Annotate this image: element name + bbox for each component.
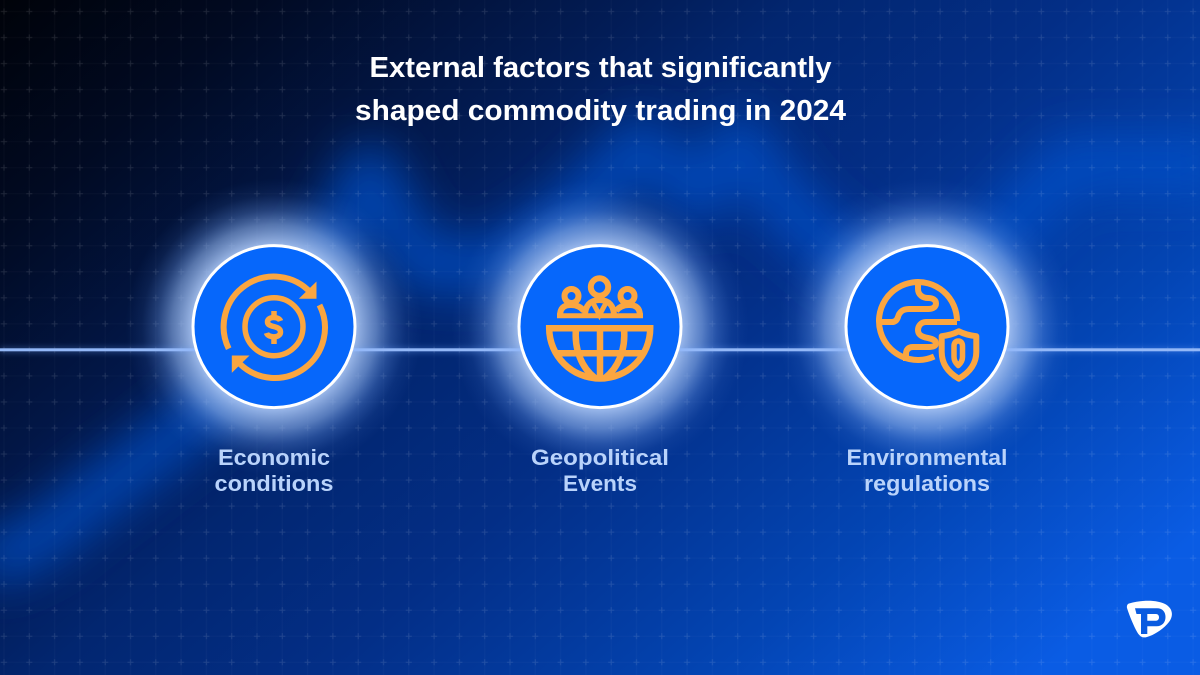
label [214,445,334,496]
horizontal timeline [0,347,1200,353]
logo [1127,601,1172,637]
icon: money cycle with dollar [224,277,325,378]
label: Events [563,471,637,496]
panel: geopolitical events [519,246,681,496]
circle badge [519,246,681,408]
label [846,445,1008,496]
blurred background price chart [0,140,1200,565]
label: Geopolitical [531,445,669,470]
label: Environmental [846,445,1008,470]
circle badge [846,246,1008,408]
logo letter P [1135,608,1166,634]
logo mark background [1127,601,1172,637]
title: External factors that significantly [370,52,832,84]
panel: economic conditions [193,246,355,496]
label [531,445,669,496]
circle glows [109,162,1092,492]
icon: people above globe [549,278,650,378]
title: shaped commodity trading in 2024 [355,95,846,127]
label: regulations [864,471,990,496]
label: Economic [218,445,330,470]
circle badge [193,246,355,408]
panel: environmental regulations [846,246,1008,496]
title [355,52,846,127]
label: conditions [214,471,334,496]
icon: globe with shield [879,282,976,379]
